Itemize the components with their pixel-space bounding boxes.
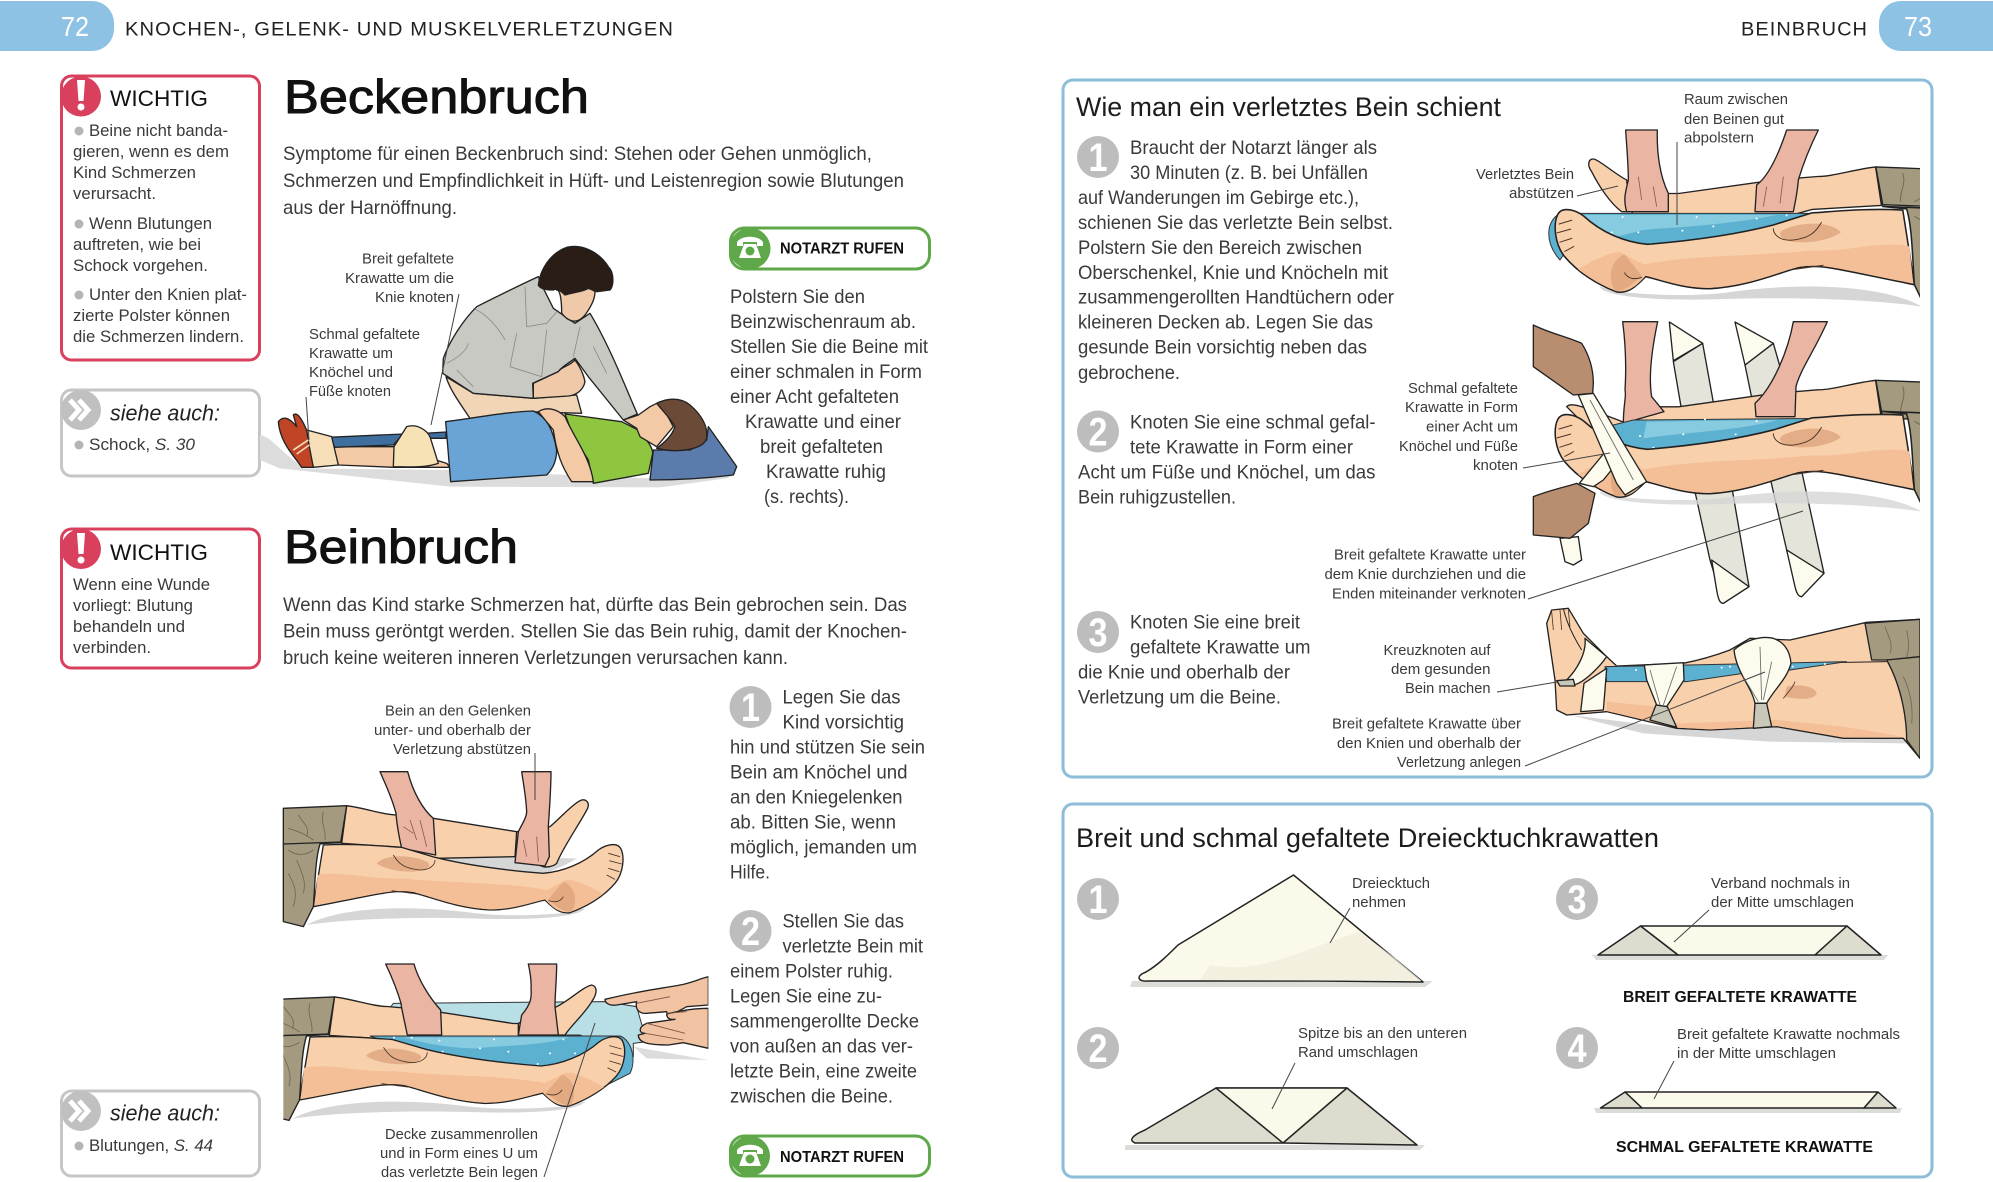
splint step 2: Knoten Sie eine schmal gefal- (1130, 412, 1376, 434)
labels: splint illustrations: Kreuzknoten auf (1384, 642, 1491, 659)
step 1 Beinbruch: an den Kniegelenken (730, 786, 902, 808)
labels: splint illustrations (1324, 91, 1803, 771)
text block: Polstern: Krawatte ruhig (766, 461, 886, 483)
step 1 Beinbruch: Hilfe. (730, 862, 770, 884)
step 1 Beinbruch: Kind vorsichtig (782, 712, 904, 734)
panel: Wie man ein verletztes Bein schient (1063, 80, 1949, 777)
panel: Wichtig Beckenbruch: WICHTIG (110, 86, 208, 111)
warning bullet text: auftreten, wie bei (73, 236, 201, 254)
warning bullet text: Unter den Knien plat- (89, 286, 247, 304)
panel: siehe auch Blutungen (61, 1091, 260, 1176)
splint step 1: schienen Sie das verletzte Bein selbst. (1078, 212, 1393, 234)
step 1 Beinbruch: Legen Sie das (782, 686, 901, 708)
splint step 1: Polstern Sie den Bereich zwischen (1078, 237, 1362, 259)
label: abstützen: unter- und oberhalb der (374, 722, 531, 739)
labels: Beckenbruch illustration: Füße knoten (309, 383, 391, 400)
warning bullet text: gieren, wenn es dem (73, 143, 229, 161)
panel heading: Breit und schmal gefaltete Dreiecktuchkrawatten (1076, 823, 1659, 853)
labels: Beckenbruch illustration: Knie knoten (375, 289, 454, 306)
labels: splint illustrations: Verletztes Bein (1476, 166, 1574, 183)
left page tab with page number 72: 72 (61, 11, 89, 42)
callout: Notarzt rufen top (730, 228, 930, 269)
splint step 1: 30 Minuten (z. B. bei Unfällen (1130, 162, 1368, 184)
right page tab with page number 73: 73 (1904, 11, 1932, 42)
panel: Wichtig Beinbruch: verbinden. (73, 639, 151, 657)
label: abstützen: Verletzung abstützen (393, 741, 531, 758)
splint step 3: Verletzung um die Beine. (1078, 686, 1281, 708)
text block: Polstern (730, 286, 929, 508)
labels: splint illustrations: Schmal gefaltete (1408, 380, 1518, 397)
fold step 3: broad cravat: der Mitte umschlagen (1711, 894, 1854, 911)
splint step 3: die Knie und oberhalb der (1078, 662, 1290, 684)
splint step 3: Knoten Sie eine breit (1130, 612, 1301, 634)
heading: Beinbruch: Beinbruch (284, 520, 518, 573)
labels: splint illustrations: Knöchel und Füße (1399, 438, 1518, 455)
illustration: padding between legs (1549, 130, 1949, 309)
labels: Beckenbruch illustration: Krawatte um die (345, 270, 454, 287)
illustration: knots around knees (1547, 608, 1920, 758)
step 2 Beinbruch: 2 (741, 910, 760, 954)
text block: Polstern: Polstern Sie den (730, 286, 865, 308)
step 1 Beinbruch: 1 (741, 686, 760, 730)
fold step 4: narrow cravat: in der Mitte umschlagen (1677, 1045, 1836, 1062)
illustration: man treating child on the floor (260, 246, 737, 487)
splint step 2: Bein ruhigzustellen. (1078, 486, 1236, 508)
fold step 1: triangle (1077, 875, 1433, 987)
splint step 1: gebrochene. (1078, 362, 1180, 384)
panel: Wichtig Beinbruch: vorliegt: Blutung (73, 597, 193, 615)
step 2 Beinbruch: letzte Bein, eine zweite (730, 1060, 917, 1082)
text block: Beinbruch intro: Bein muss geröntgt werden. Stellen Sie das Bein ruhig, damit der Knochen- (283, 620, 907, 642)
labels: Beckenbruch illustration: Knöchel und (309, 364, 393, 381)
labels: splint illustrations: Verletzung anlegen (1397, 754, 1521, 771)
labels: splint illustrations: Raum zwischen (1684, 91, 1788, 108)
step 2 Beinbruch: Stellen Sie das (782, 910, 904, 932)
step 1 Beinbruch: ab. Bitten Sie, wenn (730, 812, 896, 834)
splint step 3: 3 (1088, 611, 1108, 655)
splint step 1 (1077, 136, 1394, 384)
panel: Wichtig Beinbruch: WICHTIG (110, 540, 208, 565)
step 2 Beinbruch: verletzte Bein mit (782, 936, 924, 958)
step 2 Beinbruch: einem Polster ruhig. (730, 960, 893, 982)
label: Decke zusammenrollen: das verletzte Bein legen (381, 1164, 538, 1181)
panel: Wichtig Beinbruch: Wenn eine Wunde (73, 576, 210, 594)
step 2 Beinbruch (730, 910, 924, 1108)
fold step 2: tip folded down: Rand umschlagen (1298, 1044, 1418, 1061)
warning bullet text (73, 122, 247, 346)
labels: splint illustrations: den Beinen gut (1684, 111, 1785, 128)
fold step 3: broad cravat (1556, 875, 1888, 1006)
labels: splint illustrations: einer Acht um (1426, 418, 1518, 436)
fold step 4: narrow cravat (1556, 1026, 1902, 1156)
fold step 4: narrow cravat: SCHMAL GEFALTETE KRAWATTE (1616, 1139, 1873, 1156)
labels: splint illustrations: den Knien und oberhalb der (1337, 735, 1521, 752)
callout: Notarzt rufen top: NOTARZT RUFEN (780, 240, 904, 258)
fold step 4: narrow cravat: Breit gefaltete Krawatte nochmals (1677, 1026, 1900, 1043)
panel: siehe auch Blutungen: siehe auch: (110, 1100, 220, 1126)
fold step 2: tip folded down: 2 (1088, 1027, 1108, 1071)
text block: Beinbruch intro (283, 594, 907, 669)
heading: Beckenbruch: Beckenbruch (284, 70, 589, 123)
panel: siehe auch Blutungen: Blutungen, S. 44 (89, 1137, 213, 1155)
step 1 Beinbruch: möglich, jemanden um (730, 836, 917, 858)
warning bullet text: Beine nicht banda- (89, 122, 228, 140)
left page tab with page number 72 (0, 1, 114, 51)
labels: splint illustrations: Enden miteinander verknoten (1332, 586, 1526, 602)
callout: Notarzt rufen bottom (730, 1136, 930, 1176)
labels: Beckenbruch illustration: Krawatte um (309, 345, 393, 362)
text block: Beinbruch intro: bruch keine weiteren inneren Verletzungen verursachen kann. (283, 647, 788, 669)
warning bullet text: die Schmerzen lindern. (73, 328, 244, 346)
text block: Polstern: (s. rechts). (764, 486, 849, 508)
labels: splint illustrations: dem Knie durchziehen und die (1324, 566, 1526, 583)
text block: Beinbruch intro: Wenn das Kind starke Schmerzen hat, dürfte das Bein gebrochen sein. Das (283, 594, 907, 616)
splint step 3: gefaltete Krawatte um (1130, 636, 1310, 658)
warning bullet text: Wenn Blutungen (89, 215, 212, 233)
splint step 3 (1077, 611, 1310, 708)
labels: splint illustrations: dem gesunden (1391, 661, 1490, 678)
panel heading: Wie man ein verletztes Bein schient (1076, 92, 1501, 122)
panel: Wichtig Beinbruch: behandeln und (73, 618, 185, 636)
illustration: figure-eight bandage at feet (1533, 322, 1949, 603)
splint step 1: Oberschenkel, Knie und Knöcheln mit (1078, 262, 1389, 284)
step 2 Beinbruch: von außen an das ver- (730, 1036, 913, 1058)
text block: Beckenbruch intro: aus der Harnöffnung. (283, 197, 457, 219)
right page tab with page number 73 (1879, 1, 1993, 51)
text block: Polstern: einer Acht gefalteten (730, 386, 899, 408)
labels: splint illustrations: Breit gefaltete Krawatte über (1332, 716, 1521, 732)
labels: splint illustrations: Bein machen (1405, 680, 1490, 697)
callout: Notarzt rufen bottom: NOTARZT RUFEN (780, 1149, 904, 1166)
splint step 2 (1077, 410, 1376, 508)
labels: splint illustrations: Breit gefaltete Krawatte unter (1334, 546, 1526, 564)
step 1 Beinbruch: Bein am Knöchel und (730, 762, 908, 784)
splint step 1: 1 (1088, 136, 1108, 180)
left running header: KNOCHEN-, GELENK- UND MUSKELVERLETZUNGEN (125, 20, 674, 40)
label: Decke zusammenrollen (380, 1023, 595, 1181)
panel: siehe auch Schock (61, 390, 260, 476)
panel: siehe auch Schock: siehe auch: (110, 400, 220, 426)
fold step 3: broad cravat: 3 (1568, 878, 1586, 922)
fold step 1: triangle: 1 (1088, 878, 1108, 922)
text block: Polstern: Krawatte und einer (745, 411, 901, 433)
labels: Beckenbruch illustration: Breit gefaltete (362, 250, 454, 268)
splint step 2: Acht um Füße und Knöchel, um das (1078, 462, 1376, 484)
warning bullet text: Kind Schmerzen (73, 164, 196, 182)
labels: splint illustrations: abstützen (1509, 185, 1574, 202)
label: abstützen: Bein an den Gelenken (385, 702, 531, 720)
legs (278, 414, 450, 467)
fold step 2: tip folded down (1077, 1025, 1467, 1150)
fold step 1: triangle: nehmen (1352, 894, 1406, 911)
labels: Beckenbruch illustration: Schmal gefaltete (309, 326, 420, 343)
fold step 3: broad cravat: BREIT GEFALTETE KRAWATTE (1623, 989, 1857, 1006)
right running header: BEINBRUCH (1741, 20, 1868, 40)
warning bullet text: Schock vorgehen. (73, 257, 208, 275)
labels: splint illustrations: abpolstern (1684, 130, 1754, 146)
label: Decke zusammenrollen: und in Form eines U um (380, 1145, 538, 1162)
splint step 1: kleineren Decken ab. Legen Sie das (1078, 312, 1373, 334)
warning bullet text: verursacht. (73, 185, 156, 203)
labels: Beckenbruch illustration (306, 250, 459, 440)
splint step 1: gesunde Bein vorsichtig neben das (1078, 336, 1367, 358)
step 2 Beinbruch: Legen Sie eine zu- (730, 986, 882, 1008)
text block: Polstern: einer schmalen in Form (730, 361, 922, 383)
man body (443, 246, 637, 420)
panel: Wichtig Beckenbruch (61, 76, 260, 360)
panel: Wichtig Beinbruch (61, 529, 260, 668)
illustration: hands supporting injured leg (283, 772, 623, 927)
step 2 Beinbruch: sammengerollte Decke (730, 1010, 919, 1032)
step 1 Beinbruch (730, 686, 925, 884)
splint step 1: zusammengerollten Handtüchern oder (1078, 286, 1394, 308)
panel: Breit und schmal gefaltete Dreiecktuchkrawatten (1063, 804, 1932, 1177)
child body (446, 399, 737, 483)
text block: Beckenbruch intro: Symptome für einen Beckenbruch sind: Stehen oder Gehen unmöglich, (283, 143, 872, 165)
text block: Polstern: breit gefalteten (760, 436, 883, 458)
label: abstützen (374, 702, 535, 800)
text block: Beckenbruch intro: Schmerzen und Empfindlichkeit in Hüft- und Leistenregion sowie Blutungen (283, 170, 904, 192)
label: Decke zusammenrollen: Decke zusammenrollen (385, 1126, 538, 1143)
splint step 2: tete Krawatte in Form einer (1130, 436, 1353, 458)
fold step 2: tip folded down: Spitze bis an den unteren (1298, 1025, 1467, 1042)
text block: Polstern: Beinzwischenraum ab. (730, 311, 916, 333)
text block: Polstern: Stellen Sie die Beine mit (730, 336, 929, 358)
fold step 1: triangle: Dreiecktuch (1352, 875, 1430, 892)
splint step 2: 2 (1088, 410, 1108, 454)
text block: Beckenbruch intro (283, 143, 904, 219)
labels: splint illustrations: knoten (1473, 457, 1518, 474)
warning bullet text: zierte Polster können (73, 307, 230, 325)
panel: siehe auch Schock: Schock, S. 30 (89, 436, 196, 454)
illustration: blanket rolled around leg (268, 964, 708, 1120)
fold step 3: broad cravat: Verband nochmals in (1711, 875, 1850, 892)
icon: exclamation (61, 76, 101, 116)
splint step 1: auf Wanderungen im Gebirge etc.), (1078, 187, 1359, 209)
labels: splint illustrations: Krawatte in Form (1405, 399, 1518, 416)
splint step 1: Braucht der Notarzt länger als (1130, 137, 1377, 159)
fold step 4: narrow cravat: 4 (1568, 1027, 1587, 1071)
step 2 Beinbruch: zwischen die Beine. (730, 1086, 893, 1108)
step 1 Beinbruch: hin und stützen Sie sein (730, 736, 925, 758)
